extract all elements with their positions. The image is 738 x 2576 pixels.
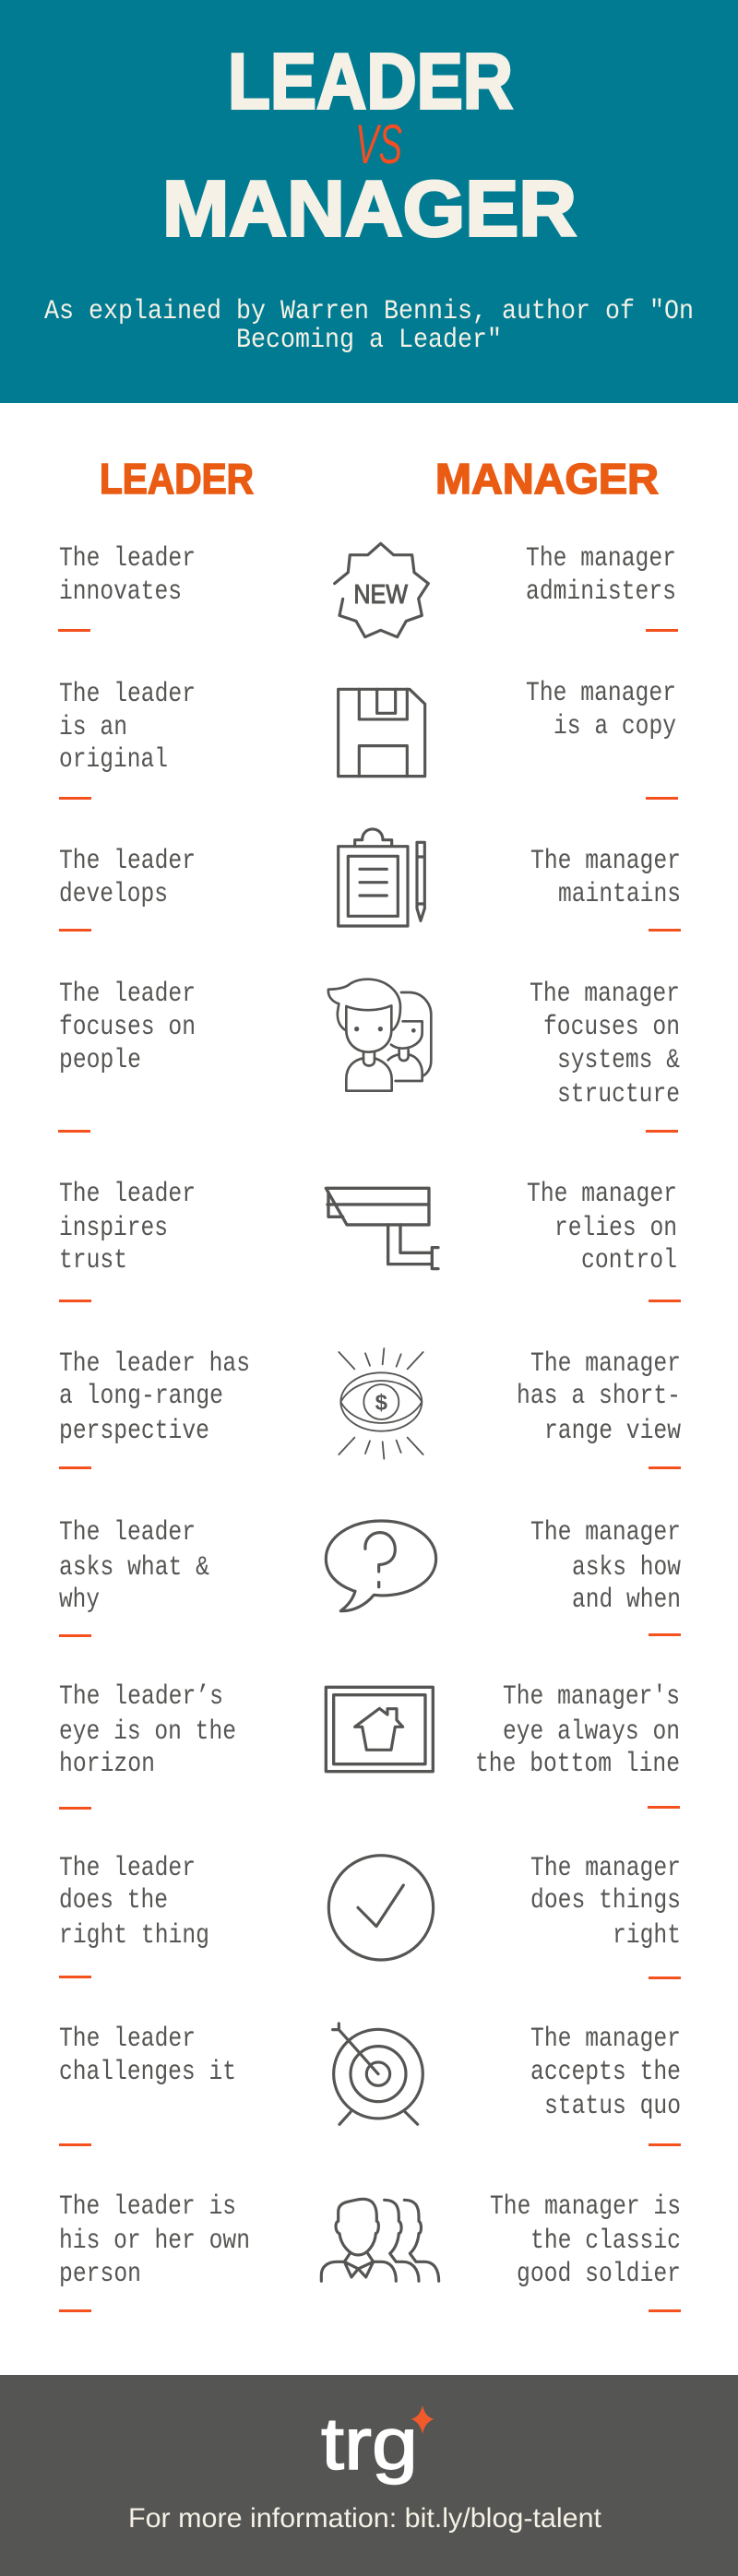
icon: speech bubble with question mark — [326, 1521, 436, 1611]
leader text: trust — [59, 1245, 127, 1276]
leader text — [59, 1681, 236, 1780]
row 6: long-range vs short-range — [59, 1348, 681, 1469]
manager text: accepts the — [530, 2057, 681, 2088]
manager text: The manager — [526, 678, 676, 709]
leader text: focuses on — [59, 1012, 196, 1043]
icon: check mark in circle — [328, 1856, 434, 1960]
title: manager: MANAGER — [162, 166, 577, 253]
manager text: administers — [526, 576, 676, 608]
footer link text: For more information: bit.ly/blog-talent — [128, 2503, 602, 2534]
leader dash — [59, 2143, 91, 2146]
leader text — [59, 979, 196, 1076]
leader text: The leader has — [59, 1348, 250, 1380]
leader text: The leader — [59, 846, 196, 877]
leader text: innovates — [59, 576, 182, 608]
row 1: innovates vs administers — [58, 543, 678, 637]
manager text: control — [581, 1245, 677, 1276]
manager text — [490, 2191, 681, 2290]
leader text: challenges it — [59, 2057, 236, 2088]
row 9: right thing vs things right — [59, 1853, 681, 1979]
manager text: The manager — [530, 2024, 681, 2055]
title: leader: LEADER — [228, 39, 513, 125]
leader text: eye is on the — [59, 1716, 236, 1748]
icon: new badge: NEW — [353, 580, 408, 610]
manager text — [530, 1517, 681, 1616]
manager dash — [648, 1806, 680, 1809]
manager text — [530, 2024, 681, 2122]
leader dash — [59, 2309, 91, 2312]
manager text: The manager — [527, 1179, 677, 1210]
manager text: The manager — [530, 1517, 681, 1549]
icon: new badge — [335, 543, 428, 637]
leader text: inspires — [59, 1213, 168, 1244]
leader text: The leader — [59, 1853, 196, 1884]
leader text — [59, 2191, 250, 2290]
leader text — [59, 1179, 196, 1276]
icon: two people — [328, 979, 431, 1091]
footer panel — [0, 2375, 738, 2576]
logo: star — [411, 2405, 434, 2434]
row 7: what and why vs how and when — [59, 1517, 681, 1637]
row 10: challenges vs status quo — [59, 2024, 681, 2146]
leader text: The leader — [59, 2024, 196, 2055]
manager text: the classic — [530, 2226, 681, 2257]
leader text — [59, 2024, 236, 2088]
leader text: why — [59, 1585, 100, 1616]
leader text: The leader is — [59, 2191, 236, 2223]
leader text: The leader — [59, 1517, 196, 1549]
leader text — [59, 1348, 250, 1447]
manager text — [530, 979, 680, 1110]
manager text: asks how — [572, 1552, 681, 1584]
icon: row of soldiers — [321, 2199, 439, 2281]
logo: trg wordmark: trg — [321, 2403, 418, 2485]
manager text: The manager — [530, 1348, 681, 1380]
manager text: maintains — [558, 879, 681, 910]
manager dash — [646, 797, 678, 800]
leader text — [59, 1853, 209, 1952]
leader dash — [59, 1300, 91, 1302]
leader dash — [59, 929, 91, 932]
column heading: manager: MANAGER — [435, 455, 659, 503]
manager dash — [649, 1300, 681, 1302]
manager text: The manager — [526, 543, 676, 575]
manager text: structure — [557, 1079, 680, 1110]
manager text — [530, 1853, 681, 1952]
subtitle — [44, 296, 694, 356]
leader dash — [59, 1807, 91, 1810]
manager text: and when — [572, 1585, 681, 1616]
manager text: does things — [530, 1885, 681, 1917]
leader text: original — [59, 744, 168, 776]
leader text: asks what & — [59, 1552, 209, 1584]
leader text: The leader — [59, 679, 196, 710]
manager text — [526, 543, 676, 608]
manager text: systems & — [557, 1045, 680, 1076]
leader text: does the — [59, 1885, 168, 1917]
column heading: leader: LEADER — [100, 455, 254, 503]
leader text: is an — [59, 712, 127, 743]
leader text: horizon — [59, 1749, 155, 1780]
leader text: The leader — [59, 543, 196, 575]
manager text: is a copy — [554, 711, 676, 742]
subtitle: Becoming a Leader" — [236, 325, 502, 356]
leader text: The leader’s — [59, 1681, 223, 1713]
leader dash — [59, 1634, 91, 1637]
row 5: trust vs control — [59, 1179, 681, 1302]
leader text: his or her own — [59, 2226, 250, 2257]
leader dash — [59, 797, 91, 800]
row 2: original vs copy — [59, 678, 678, 800]
icon: clipboard and pencil — [339, 829, 424, 926]
header banner — [0, 0, 738, 403]
leader text — [59, 1517, 209, 1616]
manager text: focuses on — [543, 1012, 680, 1043]
leader text: The leader — [59, 979, 196, 1010]
row 3: develops vs maintains — [59, 829, 681, 932]
manager text: The manager — [530, 979, 680, 1010]
manager text: The manager — [530, 846, 681, 877]
manager dash — [649, 2309, 681, 2312]
icon: framed house — [326, 1687, 433, 1772]
manager dash — [649, 1633, 681, 1636]
manager text: The manager — [530, 1853, 681, 1884]
leader text: The leader — [59, 1179, 196, 1210]
row 4: people vs systems — [58, 979, 680, 1133]
manager dash — [649, 929, 681, 932]
leader text: develops — [59, 879, 168, 910]
leader text — [59, 543, 196, 608]
manager dash — [649, 2143, 681, 2146]
manager dash — [649, 1977, 681, 1979]
leader dash — [59, 1466, 91, 1469]
manager text: good soldier — [517, 2259, 681, 2290]
leader dash — [58, 629, 90, 632]
icon: eye with dollar: $ — [375, 1391, 387, 1416]
leader text: a long-range — [59, 1381, 223, 1412]
manager text — [527, 1179, 677, 1276]
manager dash — [649, 1466, 681, 1469]
leader text: person — [59, 2259, 141, 2290]
manager dash — [646, 1130, 678, 1133]
manager text: right — [613, 1920, 681, 1952]
manager text: the bottom line — [475, 1749, 680, 1780]
leader text: right thing — [59, 1920, 209, 1952]
manager text — [530, 846, 681, 910]
manager text: The manager's — [503, 1681, 680, 1713]
manager text: range view — [544, 1416, 681, 1447]
row 8: horizon vs bottom line — [59, 1681, 680, 1810]
leader text — [59, 846, 196, 910]
icon: security camera — [326, 1188, 438, 1269]
row 11: own person vs good soldier — [59, 2191, 681, 2312]
icon: target with arrow — [333, 2024, 423, 2124]
leader dash — [59, 1976, 91, 1978]
manager text: has a short- — [517, 1381, 681, 1412]
leader text: people — [59, 1045, 141, 1076]
leader text — [59, 679, 196, 776]
manager text: status quo — [544, 2091, 681, 2122]
manager text: relies on — [554, 1213, 677, 1244]
icon: eye with dollar — [339, 1348, 423, 1459]
manager dash — [646, 629, 678, 632]
manager text — [475, 1681, 680, 1780]
manager text: eye always on — [503, 1716, 680, 1748]
manager text — [526, 678, 676, 742]
icon: floppy disk — [339, 689, 425, 777]
manager text: The manager is — [490, 2191, 681, 2223]
manager text — [517, 1348, 681, 1447]
leader dash — [58, 1130, 90, 1133]
title: vs: VS — [355, 113, 402, 175]
leader text: perspective — [59, 1416, 209, 1447]
